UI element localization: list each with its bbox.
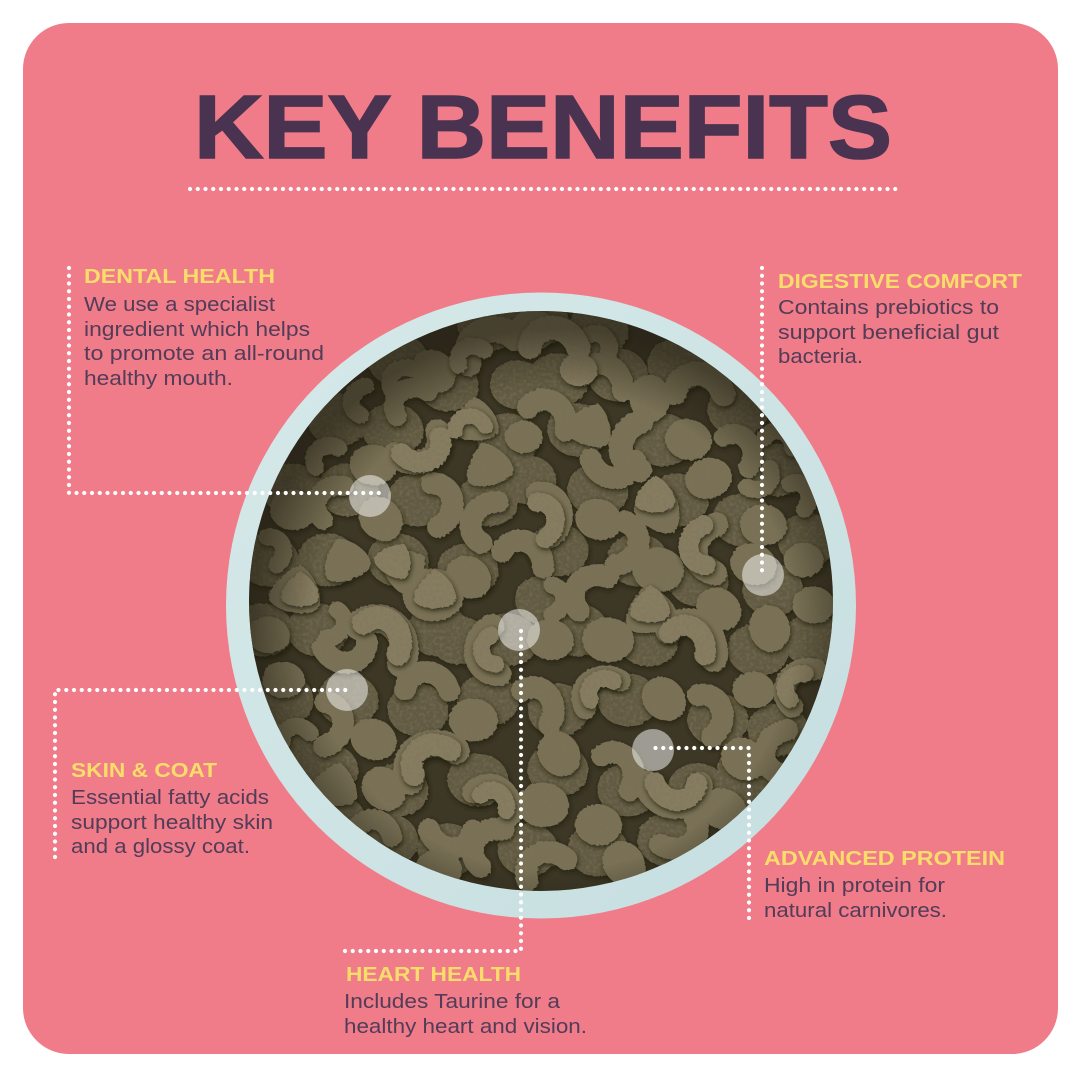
connector: advanced protein: [650, 748, 749, 918]
connector: skin and coat: [55, 690, 352, 857]
text block: advanced protein: [764, 848, 1005, 922]
text block: digestive comfort: [778, 271, 1022, 368]
text block: skin and coat: Essential fatty acids: [71, 787, 269, 809]
text block: dental health: DENTAL HEALTH: [84, 266, 275, 288]
text block: skin and coat: [71, 760, 273, 858]
text block: dental health: We use a specialist: [84, 294, 275, 316]
text block: heart health: [344, 964, 587, 1038]
connector: digestive comfort: [760, 268, 764, 575]
text block: heart health: HEART HEALTH: [346, 964, 521, 986]
text block: heart health: healthy heart and vision.: [344, 1016, 587, 1038]
marker: advanced protein: [632, 729, 674, 771]
text block: dental health: ingredient which helps: [84, 319, 310, 341]
text block: advanced protein: natural carnivores.: [764, 900, 947, 922]
connector: heart health: [345, 630, 521, 951]
text block: skin and coat: SKIN & COAT: [71, 760, 217, 782]
text block: advanced protein: ADVANCED PROTEIN: [764, 848, 1005, 870]
text block: advanced protein: High in protein for: [764, 875, 945, 897]
marker: skin and coat: [326, 669, 368, 711]
marker: digestive comfort: [742, 554, 784, 596]
text block: skin and coat: support healthy skin: [71, 812, 273, 834]
text block: skin and coat: and a glossy coat.: [71, 836, 250, 858]
text block: digestive comfort: DIGESTIVE COMFORT: [778, 271, 1022, 293]
text block: digestive comfort: bacteria.: [778, 346, 863, 368]
text block: dental health: to promote an all-round: [84, 343, 324, 365]
connector: dental health: [69, 268, 385, 493]
image: bowl of kibble: [226, 292, 856, 918]
marker: heart health: [498, 609, 540, 651]
text block: heart health: Includes Taurine for a: [344, 991, 561, 1013]
text block: dental health: [84, 266, 324, 390]
marker: dental health: [349, 475, 391, 517]
text block: digestive comfort: support beneficial gut: [778, 322, 999, 344]
text block: digestive comfort: Contains prebiotics to: [778, 297, 999, 319]
text block: dental health: healthy mouth.: [84, 368, 233, 390]
title: KEY BENEFITS: [194, 78, 892, 178]
